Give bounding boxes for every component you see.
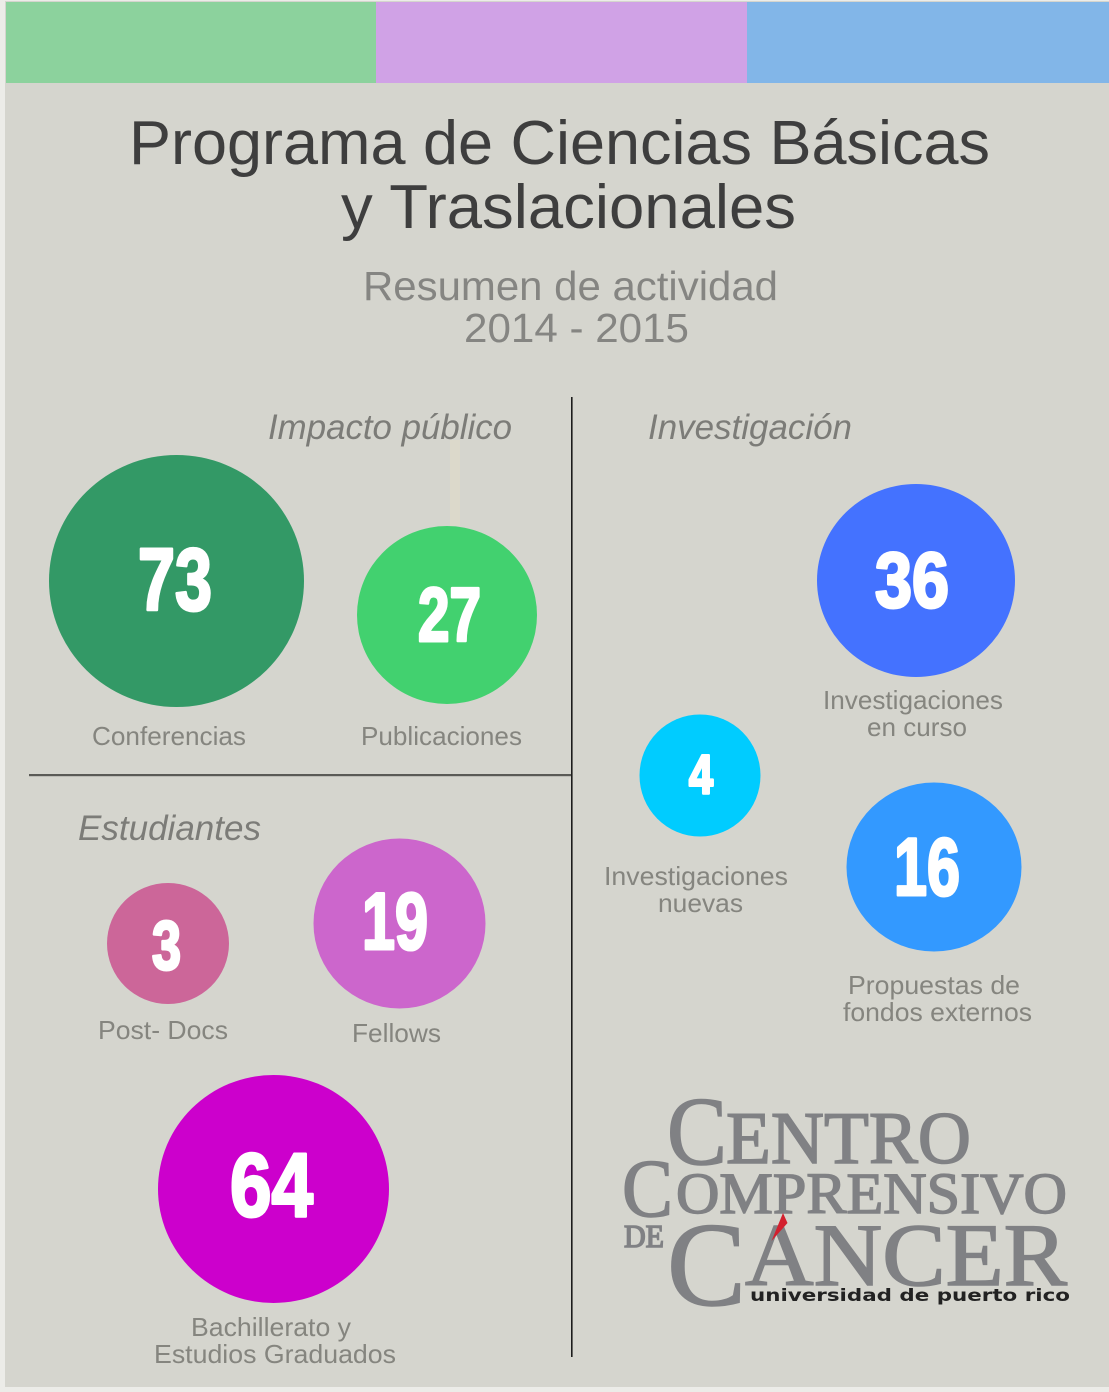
circle: 16 propuestas de fondos externos: 16: [894, 822, 960, 913]
label: Bachillerato y Estudios Graduados: Bachillerato y: [191, 1312, 351, 1342]
circle: 27 publicaciones: 27: [418, 573, 481, 658]
circle: 64 bachillerato y estudios graduados: [158, 1075, 389, 1303]
label: Investigaciones en curso: Investigaciones: [823, 685, 1003, 715]
circle: 27 publicaciones: [357, 526, 537, 704]
label: Bachillerato y Estudios Graduados: [154, 1312, 396, 1369]
label: Conferencias: Conferencias: [92, 721, 246, 751]
label: Investigaciones nuevas: Investigaciones: [604, 861, 788, 891]
circle: 36 investigaciones en curso: [817, 484, 1015, 677]
label: Propuestas de fondos externos: [843, 970, 1032, 1027]
label: Propuestas de fondos externos: fondos externos: [843, 997, 1032, 1027]
label: Investigaciones nuevas: [604, 861, 788, 918]
panel: Estudiantes: [78, 809, 486, 1369]
circle: 3 post-docs: [107, 883, 229, 1004]
label: Propuestas de fondos externos: Propuestas de: [848, 970, 1020, 1000]
logo tagline: universidad de puerto rico: [750, 1286, 1070, 1306]
subtitle: 2014 - 2015: [464, 305, 689, 351]
logo accent: [772, 1213, 788, 1241]
panel: Investigación: [604, 408, 1032, 1027]
circle: 4 investigaciones nuevas: [640, 714, 760, 836]
title: Programa de Ciencias Básicas: [129, 109, 990, 178]
logo: Centro Comprensivo de Cáncer: ENTRO: [726, 1098, 971, 1180]
label: Bachillerato y Estudios Graduados: Estudios Graduados: [154, 1339, 396, 1369]
title: y Traslacionales: [341, 173, 796, 242]
label: Publicaciones: Publicaciones: [361, 721, 522, 751]
circle: 19 fellows: [314, 838, 486, 1008]
logo: Centro Comprensivo de Cáncer: C: [667, 1078, 727, 1185]
top colour band: [6, 2, 1109, 83]
label: Investigaciones en curso: en curso: [867, 712, 967, 742]
circle: 3 post-docs: 3: [152, 907, 181, 984]
subtitle: Resumen de actividad: [363, 263, 778, 309]
panel: Impacto público: [49, 408, 537, 751]
circle: 73 conferencias: 73: [138, 530, 212, 629]
circle: 64 bachillerato y estudios graduados: 64: [230, 1136, 313, 1236]
label: Post- Docs: Post- Docs: [98, 1015, 228, 1045]
label: Investigaciones nuevas: nuevas: [658, 888, 743, 918]
logo: Centro Comprensivo de Cáncer: C: [622, 1142, 673, 1234]
label: Fellows: Fellows: [352, 1018, 441, 1048]
heading: Investigación: Investigación: [648, 408, 852, 447]
circle: 16 propuestas de fondos externos: [846, 782, 1022, 952]
logo: Centro Comprensivo de Cáncer: [622, 1078, 1070, 1331]
logo: Centro Comprensivo de Cáncer: DE: [624, 1218, 664, 1254]
logo: Centro Comprensivo de Cáncer: ANCER: [745, 1207, 1068, 1305]
circle: 4 investigaciones nuevas: 4: [689, 743, 713, 805]
subtitle: [363, 263, 778, 351]
circle: 73 conferencias: [49, 455, 304, 707]
heading: Estudiantes: Estudiantes: [78, 809, 261, 848]
title: [129, 109, 990, 242]
logo: Centro Comprensivo de Cáncer: OMPRENSIVO: [676, 1161, 1067, 1226]
circle: 19 fellows: 19: [362, 877, 428, 967]
logo: Centro Comprensivo de Cáncer: C: [667, 1198, 746, 1331]
label: Investigaciones en curso: [823, 685, 1003, 742]
circle: 36 investigaciones en curso: 36: [875, 536, 949, 624]
heading: Impacto público: Impacto público: [268, 408, 512, 447]
